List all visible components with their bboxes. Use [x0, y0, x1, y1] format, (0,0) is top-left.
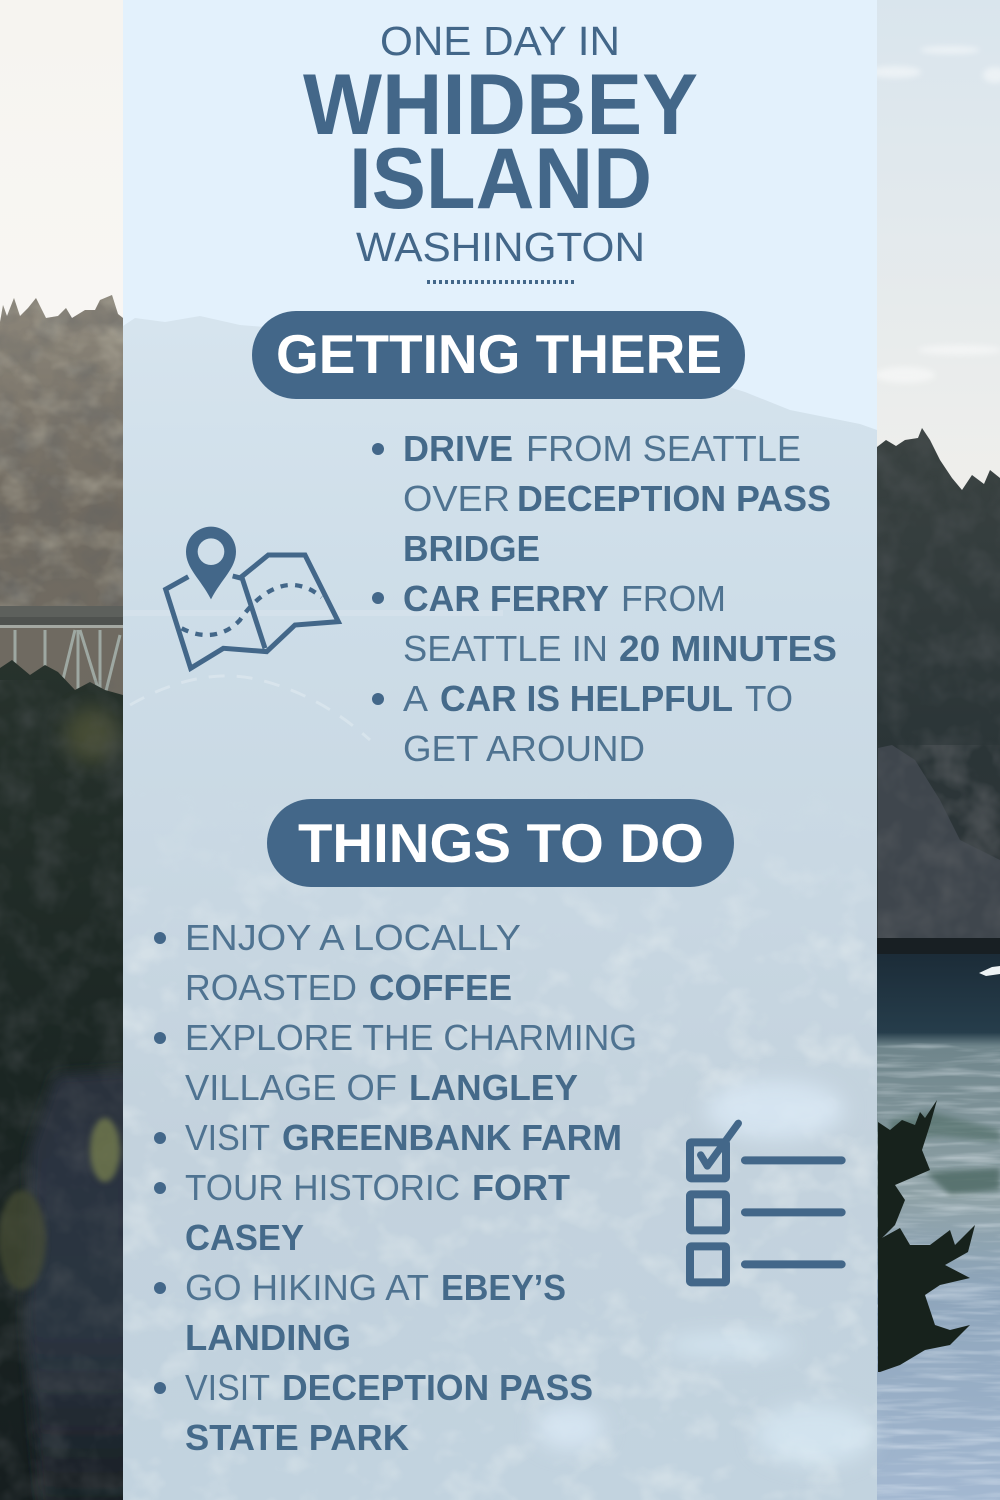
- list: getting there: SEATTLE IN: [403, 628, 608, 669]
- heading pill: getting there: GETTING THERE: [276, 323, 722, 385]
- list: getting there: CAR FERRY: [403, 578, 609, 619]
- list: getting there: BRIDGE: [403, 528, 540, 569]
- icon: map with location pin: [166, 527, 338, 668]
- list: things to do: GO HIKING AT: [185, 1267, 429, 1308]
- list: things to do: DECEPTION PASS: [282, 1367, 593, 1408]
- list: things to do: VISIT: [185, 1117, 270, 1158]
- title: WHIDBEY: [303, 57, 698, 153]
- icon: checklist: [690, 1123, 842, 1282]
- list: things to do: LANGLEY: [409, 1067, 578, 1108]
- list: things to do: [154, 917, 637, 1458]
- translucent centre panel with hazy photo showing through: [123, 0, 877, 1500]
- list: things to do: ROASTED: [185, 967, 357, 1008]
- list: things to do: ENJOY A LOCALLY: [185, 917, 521, 958]
- heading pill: things to do: THINGS TO DO: [298, 812, 704, 874]
- dotted divider: [427, 280, 574, 284]
- list: things to do: EXPLORE THE CHARMING: [185, 1017, 637, 1058]
- list: things to do: COFFEE: [369, 967, 512, 1008]
- list: getting there: DECEPTION PASS: [517, 478, 831, 519]
- list: things to do: FORT: [472, 1167, 570, 1208]
- list: getting there: [372, 428, 837, 769]
- list: things to do: VISIT: [185, 1367, 270, 1408]
- background photo: right side with forest, rock and water: [869, 0, 1000, 1500]
- list: getting there: TO: [745, 678, 793, 719]
- list: things to do: VILLAGE OF: [185, 1067, 397, 1108]
- list: getting there: CAR IS HELPFUL: [440, 678, 733, 719]
- list: getting there: 20 MINUTES: [619, 628, 837, 669]
- list: things to do: STATE PARK: [185, 1417, 409, 1458]
- list: getting there: FROM SEATTLE: [526, 428, 801, 469]
- title: [303, 18, 698, 270]
- list: getting there: A: [403, 678, 428, 719]
- list: things to do: TOUR HISTORIC: [185, 1167, 460, 1208]
- list: things to do: EBEY’S: [441, 1267, 566, 1308]
- title: WASHINGTON: [356, 224, 645, 270]
- title: ISLAND: [349, 131, 652, 227]
- background photo: left side with forest, bridge and rock: [0, 0, 135, 1500]
- list: getting there: FROM: [621, 578, 726, 619]
- list: getting there: DRIVE: [403, 428, 513, 469]
- heading pill: getting there: [252, 311, 745, 399]
- heading pill: things to do: [267, 799, 734, 887]
- list: things to do: CASEY: [185, 1217, 304, 1258]
- list: things to do: GREENBANK FARM: [282, 1117, 622, 1158]
- list: getting there: GET AROUND: [403, 728, 645, 769]
- list: things to do: LANDING: [185, 1317, 351, 1358]
- list: getting there: OVER: [403, 478, 510, 519]
- title: ONE DAY IN: [380, 18, 620, 64]
